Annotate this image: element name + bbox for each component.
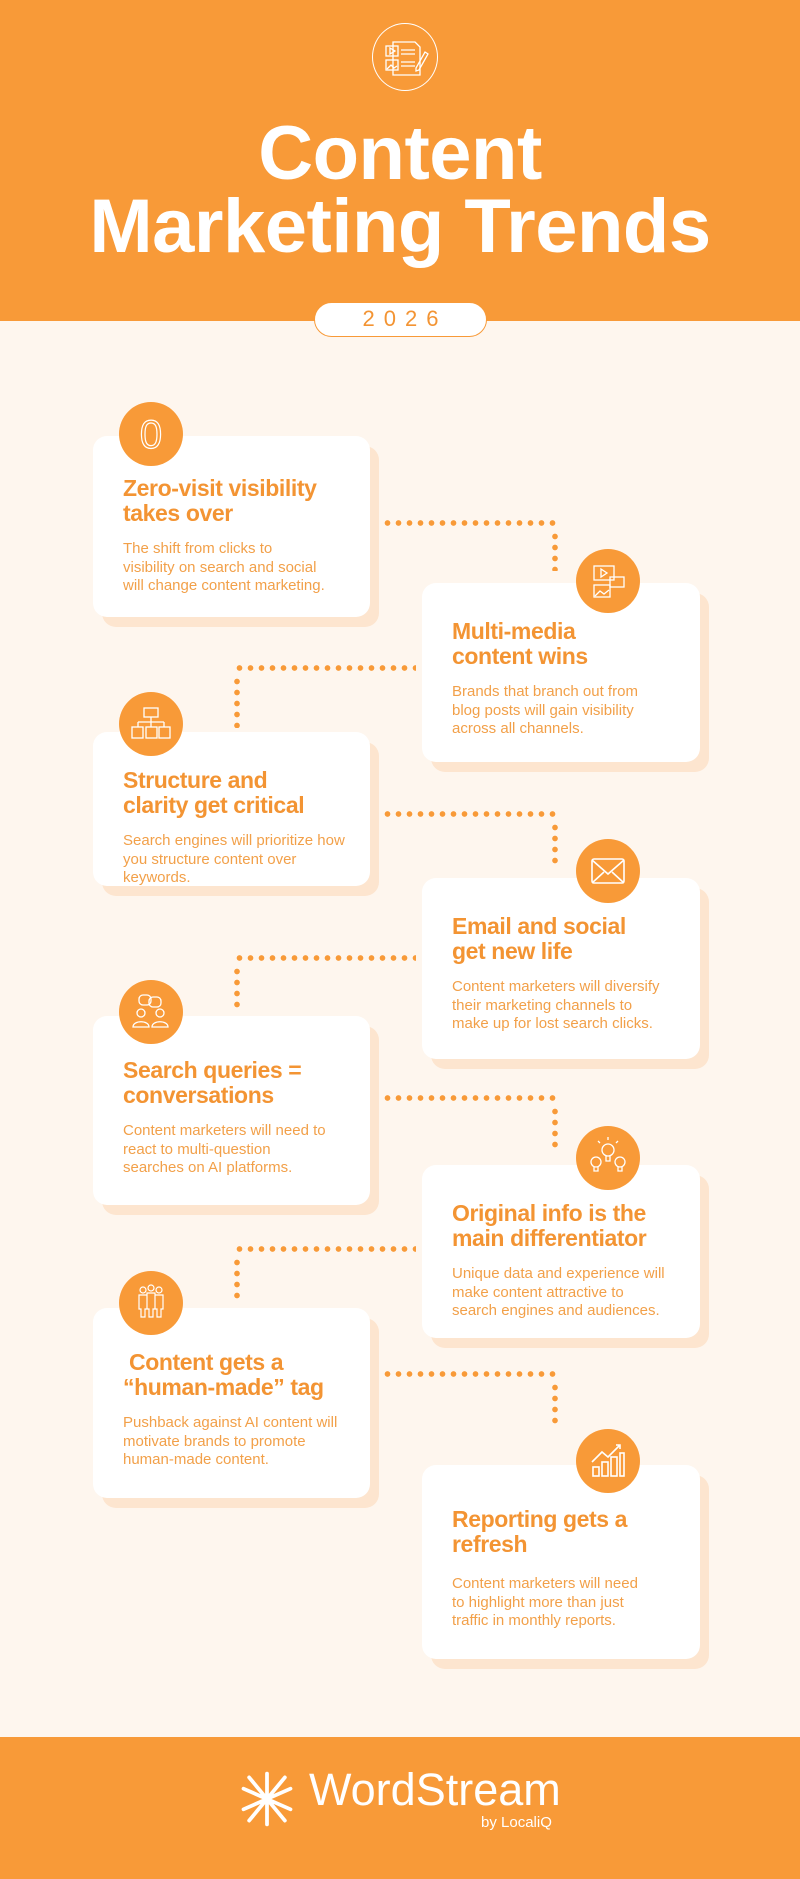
year pill (314, 302, 487, 337)
card 3 (93, 732, 370, 886)
card 2: across all channels. (452, 720, 584, 737)
title: Content (258, 111, 542, 196)
icon: lightbulbs (576, 1126, 640, 1190)
card 6: Original info is the (452, 1200, 646, 1226)
card 8: Reporting gets a (452, 1506, 627, 1532)
title (89, 111, 711, 269)
card 4: their marketing channels to (452, 996, 632, 1014)
icon: conversation (119, 980, 183, 1044)
year pill: 2026 (363, 306, 447, 331)
card 2: Brands that branch out from (452, 683, 638, 700)
logo: WordStream by LocaliQ: by LocaliQ (481, 1814, 552, 1831)
card 8: traffic in monthly reports. (452, 1612, 616, 1629)
card 3: Search engines will prioritize how (123, 832, 345, 849)
icon: people (119, 1271, 183, 1335)
card 2: content wins (452, 643, 588, 669)
title: Marketing Trends (89, 184, 711, 269)
card 3: clarity get critical (123, 792, 304, 818)
card 3: you structure content over (123, 850, 296, 868)
card 4: Email and social (452, 913, 626, 939)
card 5: searches on AI platforms. (123, 1159, 292, 1176)
card 7 (93, 1308, 370, 1498)
card 7: human-made content. (123, 1451, 269, 1468)
card 4: make up for lost search clicks. (452, 1015, 653, 1032)
footer band (0, 1737, 800, 1879)
icon: envelope (576, 839, 640, 903)
card 5: Search queries = (123, 1057, 301, 1083)
icon: content document (372, 23, 438, 91)
card 8: refresh (452, 1531, 527, 1557)
card 2: Multi-media (452, 618, 575, 644)
card 1: will change content marketing. (123, 577, 325, 594)
card 5: conversations (123, 1082, 274, 1108)
header band (0, 0, 800, 321)
card 4 (422, 878, 700, 1059)
card 5: Content marketers will need to (123, 1122, 326, 1139)
card 8: to highlight more than just (452, 1594, 624, 1610)
card 8 (422, 1465, 700, 1659)
card 2: blog posts will gain visibility (452, 702, 634, 718)
logo: WordStream by LocaliQ (242, 1764, 561, 1831)
card 6: main differentiator (452, 1225, 646, 1251)
card 6 (422, 1165, 700, 1338)
card 4: get new life (452, 938, 572, 964)
card 1: The shift from clicks to (123, 540, 272, 557)
card 2 (422, 583, 700, 762)
card 1 (93, 436, 370, 617)
icon: hierarchy (119, 692, 183, 756)
card 7: Content gets a (129, 1349, 283, 1375)
card 5 (93, 1016, 370, 1205)
card 7: Pushback against AI content will (123, 1414, 337, 1431)
icon: growth chart (576, 1429, 640, 1493)
card 1: Zero-visit visibility (123, 475, 317, 501)
card 5: react to multi-question (123, 1140, 271, 1158)
card 6: Unique data and experience will (452, 1265, 665, 1282)
logo: WordStream by LocaliQ: WordStream (309, 1764, 561, 1815)
card 1: takes over (123, 500, 233, 526)
card 4: Content marketers will diversify (452, 978, 660, 995)
card 7: motivate brands to promote (123, 1432, 306, 1450)
card 8: Content marketers will need (452, 1575, 638, 1592)
card 6: search engines and audiences. (452, 1302, 660, 1319)
card 7: “human-made” tag (123, 1374, 324, 1400)
card 1: visibility on search and social (123, 558, 316, 576)
card 6: make content attractive to (452, 1284, 624, 1300)
icon: zero: 0 (140, 413, 162, 457)
card 3: Structure and (123, 767, 267, 793)
connectors (382, 520, 558, 526)
icon: zero (119, 402, 183, 466)
icon: multimedia (576, 549, 640, 613)
card 3: keywords. (123, 869, 191, 886)
